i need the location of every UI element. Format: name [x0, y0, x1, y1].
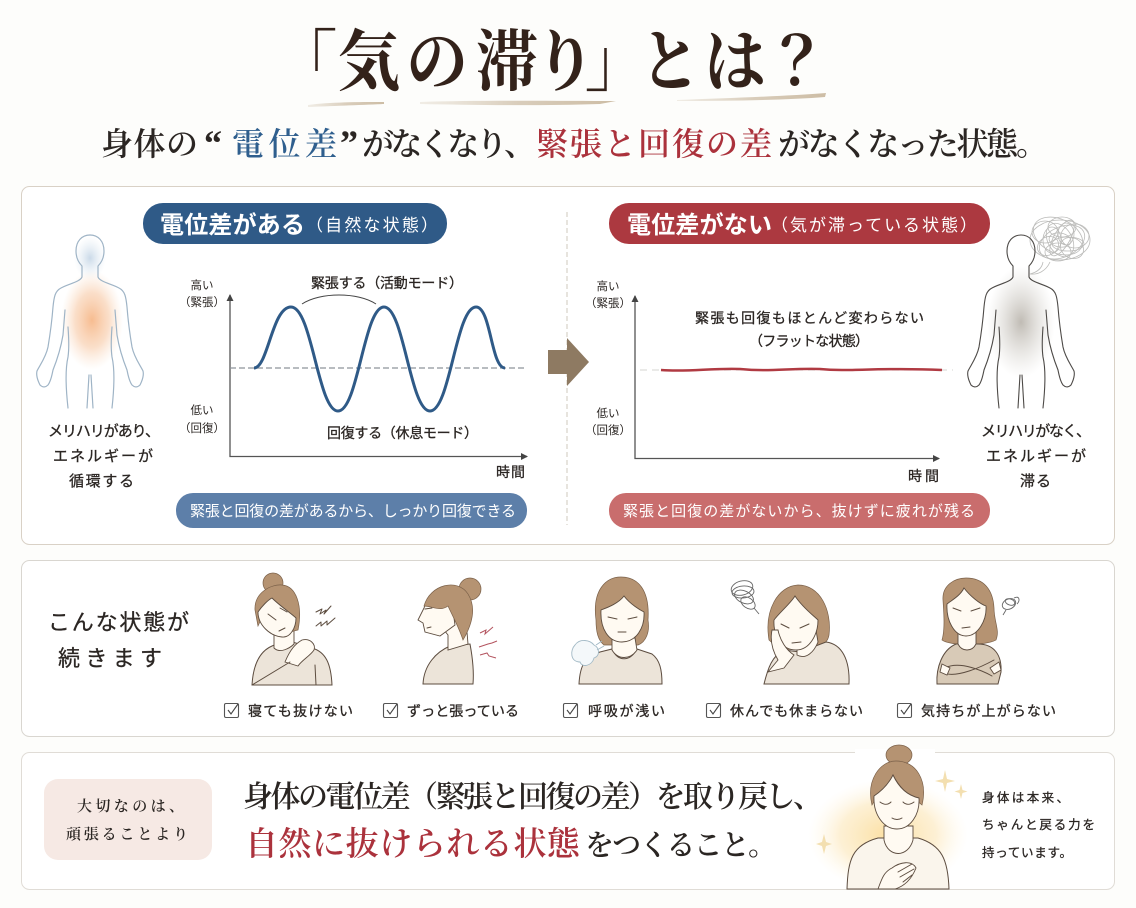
pill heading: no potential difference: 電位差がない: [627, 211, 772, 239]
axis labels: 低い: [596, 407, 620, 420]
panel: symptoms: [22, 560, 1114, 736]
callout: blue conclusion: [176, 493, 527, 528]
caption: healthy body: エネルギーが: [53, 448, 153, 465]
tangled thought bubble: [1027, 210, 1090, 274]
main message: 身体の電位差（緊張と回復の差）を取り戻し、: [243, 781, 823, 814]
pink label box: 頑張ることより: [66, 826, 188, 843]
subtitle: がなくなり、: [362, 126, 536, 162]
title: 「気の滞り」とは？: [275, 26, 828, 100]
illustration: woman in profile with stiff neck: [418, 578, 497, 684]
side note: ちゃんと戻る力を: [982, 818, 1095, 832]
axis labels: 高い: [596, 280, 620, 293]
pink label box: [44, 779, 212, 860]
main message: をつくること。: [585, 830, 777, 862]
illustration: woman holding shoulder: [252, 573, 335, 685]
subtitle: 電位差: [232, 126, 337, 162]
checklist item: 気持ちが上がらない: 気持ちが上がらない: [921, 703, 1056, 719]
symptoms heading: [48, 610, 189, 671]
pink label box: 大切なのは、: [77, 798, 184, 815]
subtitle: [101, 123, 1048, 163]
pill heading: no potential difference: （気が滞っている状態）: [771, 216, 977, 235]
illustration: calm woman with hand on chest: [808, 745, 968, 891]
panel: electric potential comparison: [22, 186, 1114, 544]
pill heading: has potential difference: （自然な状態）: [306, 216, 438, 235]
axis labels: [585, 280, 631, 437]
checklist item: ずっと張っている: ずっと張っている: [407, 703, 519, 719]
caption: stagnant body: [981, 423, 1091, 490]
caption: healthy body: [48, 423, 160, 490]
chart: flat state: 時間: [908, 468, 939, 484]
callout: blue conclusion: 緊張と回復の差があるから、しっかり回復できる: [190, 503, 516, 520]
axis labels: [179, 279, 225, 435]
chart: wave of tension and recovery: 回復する（休息モード）: [327, 425, 478, 441]
subtitle: がなくなった状態。: [778, 126, 1048, 162]
subtitle: “: [204, 123, 222, 163]
body figure: stagnant: [968, 210, 1090, 408]
main message: 自然に抜けられる状態: [245, 826, 582, 863]
main message: [243, 781, 823, 863]
caption: stagnant body: エネルギーが: [986, 448, 1086, 465]
caption: healthy body: メリハリがあり、: [48, 423, 160, 440]
chart: wave of tension and recovery: 時間: [496, 464, 525, 480]
axis labels: 高い: [190, 279, 214, 292]
body figure: healthy: [37, 235, 143, 408]
subtitle: 緊張と回復の差: [536, 126, 772, 162]
chart: flat state: （フラットな状態）: [749, 333, 869, 349]
axis labels: （回復）: [179, 421, 225, 435]
chart: flat state: [585, 280, 953, 484]
pill heading: has potential difference: [143, 203, 447, 244]
pill heading: has potential difference: 電位差がある: [160, 211, 305, 239]
caption: stagnant body: メリハリがなく、: [981, 423, 1091, 440]
caption: healthy body: 循環する: [69, 473, 134, 490]
axis labels: 低い: [190, 404, 214, 417]
symptoms heading: 続きます: [58, 646, 162, 671]
subtitle: ”: [340, 123, 358, 163]
arrow: [548, 338, 589, 386]
callout: red conclusion: [609, 493, 990, 528]
illustration: woman with crossed arms: [937, 578, 1019, 684]
caption: stagnant body: 滞る: [1020, 473, 1051, 490]
callout: red conclusion: 緊張と回復の差がないから、抜けずに疲れが残る: [623, 503, 975, 520]
axis labels: （緊張）: [179, 296, 225, 309]
side note: [982, 790, 1095, 860]
chart: wave of tension and recovery: 緊張する（活動モード）: [311, 275, 463, 291]
checklist item: 休んでも休まらない: 休んでも休まらない: [730, 703, 863, 719]
panel: key message: [22, 745, 1114, 891]
checklist item: 寝ても抜けない: 寝ても抜けない: [248, 703, 353, 719]
axis labels: （緊張）: [585, 297, 631, 310]
chart: flat state: 緊張も回復もほとんど変わらない: [695, 310, 924, 326]
side note: 持っています。: [982, 845, 1072, 860]
pill heading: no potential difference: [609, 203, 990, 244]
side note: 身体は本来、: [982, 790, 1069, 805]
title brush underline: [308, 93, 826, 107]
illustration: woman with shallow breath: [572, 577, 662, 684]
symptoms heading: こんな状態が: [48, 610, 189, 635]
chart: wave of tension and recovery: [179, 275, 528, 480]
checklist item: 呼吸が浅い: 呼吸が浅い: [588, 703, 665, 719]
subtitle: 身体の: [101, 126, 198, 162]
illustration: woman resting cheek on hand: [730, 578, 849, 684]
axis labels: （回復）: [585, 423, 631, 437]
